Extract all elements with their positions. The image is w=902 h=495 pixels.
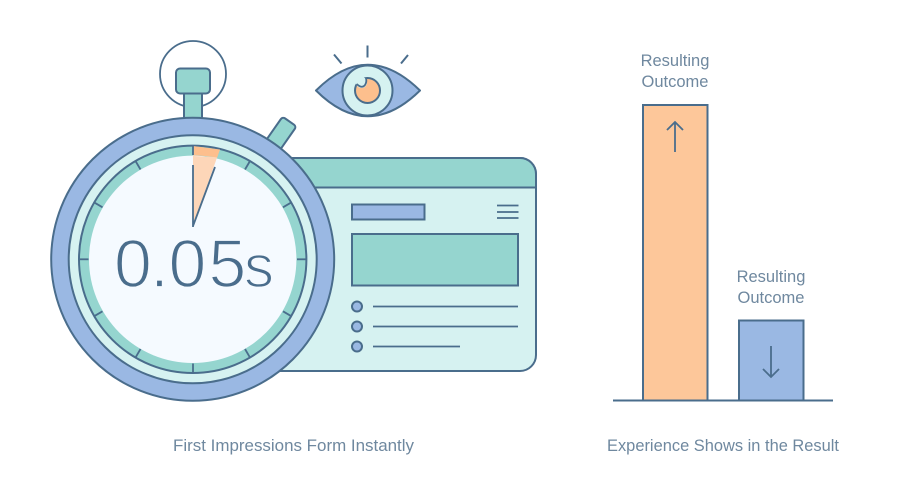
- tall orange bar: [643, 105, 708, 400]
- label: short bar outcome: Outcome: [738, 289, 804, 307]
- time readout: .: [150, 226, 169, 302]
- stopwatch crown: [176, 68, 210, 94]
- caption: experience: Experience Shows in the Result: [607, 437, 839, 455]
- short blue bar: [739, 320, 804, 400]
- time readout: 5: [208, 226, 246, 302]
- list item three: [352, 342, 460, 352]
- panel: browser window: [270, 158, 536, 371]
- page title placeholder: [352, 204, 424, 220]
- stopwatch stem: [184, 92, 202, 120]
- bar chart: resulting outcomes: [613, 52, 833, 400]
- icon: stopwatch: [51, 41, 334, 401]
- teal dial ring: [79, 146, 306, 373]
- time readout: s: [244, 233, 274, 300]
- hamburger menu icon: [497, 206, 518, 218]
- list item one: [352, 302, 518, 312]
- stopwatch side button: [264, 117, 296, 153]
- light inner ring: [69, 135, 317, 383]
- list item two: [352, 322, 518, 332]
- dial tick marks: [79, 146, 306, 373]
- caption: first impressions: First Impressions Form Instantly: [173, 437, 415, 455]
- time readout: 0: [168, 226, 206, 302]
- browser body: [270, 158, 536, 371]
- label: short bar outcome: Resulting: [737, 268, 805, 286]
- hero image placeholder: [352, 234, 518, 286]
- stopwatch ring handle: [160, 41, 226, 107]
- label: tall bar outcome: Outcome: [642, 73, 708, 91]
- icon: down arrow: [763, 346, 779, 377]
- chart baseline: [613, 400, 833, 402]
- icon: eye: [316, 46, 420, 116]
- stopwatch hand lines: [193, 165, 215, 227]
- elapsed wedge on face: [193, 156, 217, 226]
- icon: up arrow: [667, 122, 683, 152]
- clock face: [89, 156, 296, 363]
- elapsed wedge on dial: [193, 146, 220, 158]
- browser header bar: [270, 158, 536, 188]
- outer blue ring: [51, 118, 334, 401]
- label: tall bar outcome: Resulting: [641, 52, 709, 70]
- time readout: 0: [114, 226, 152, 302]
